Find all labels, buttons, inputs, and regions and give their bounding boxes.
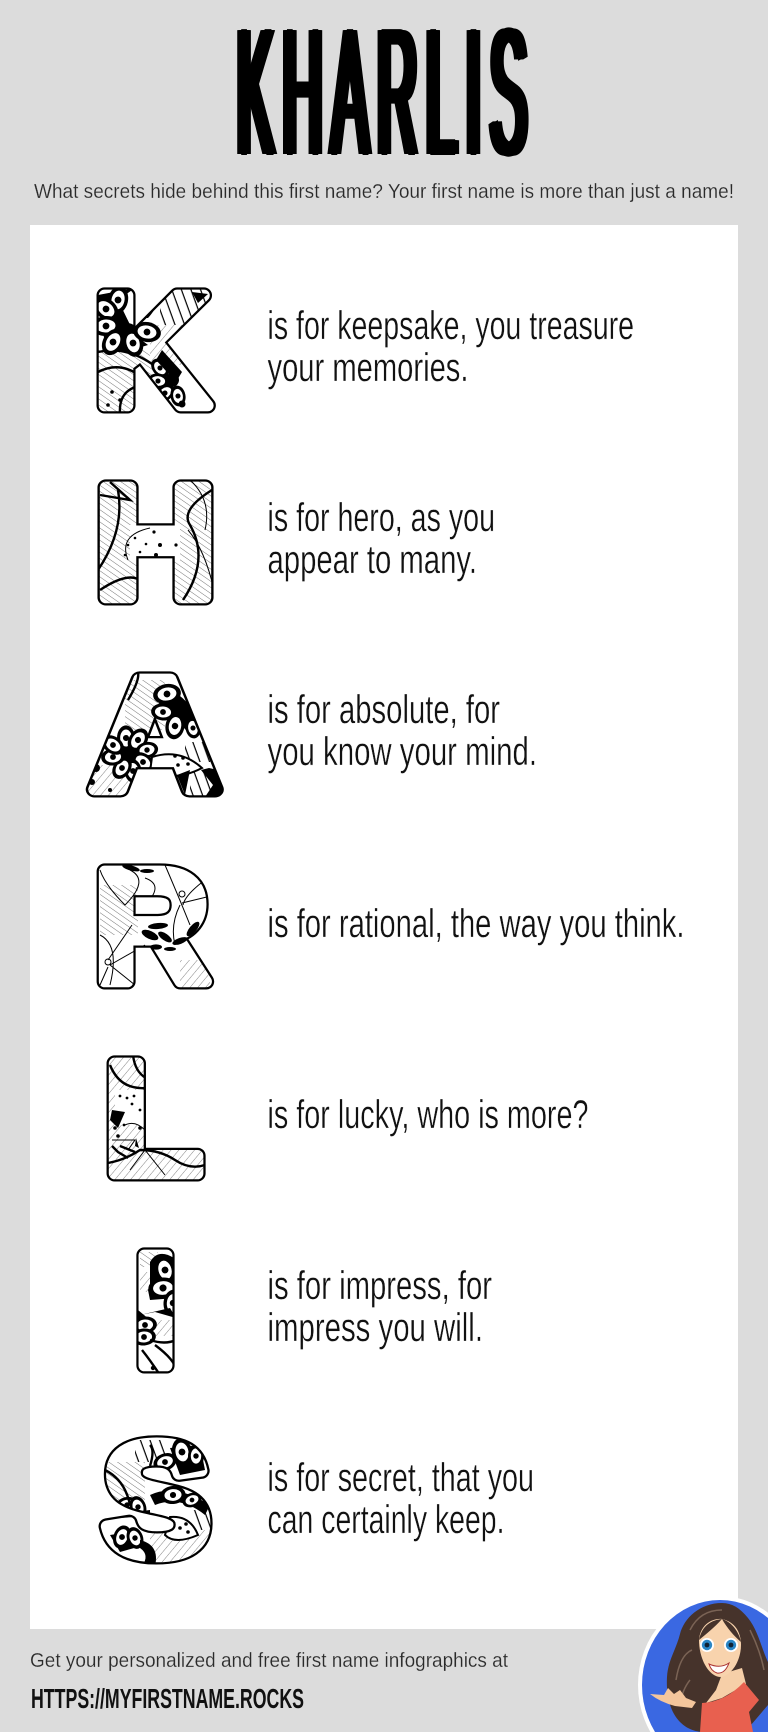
text: L line: is for lucky, who is more? <box>268 1093 588 1137</box>
letter A mandala: A <box>90 644 220 823</box>
text: A line: you know your mind. <box>268 730 537 774</box>
avatar badge <box>638 1596 768 1732</box>
text: I line <box>268 1264 492 1350</box>
letter R mandala <box>96 863 214 990</box>
text: I line: is for impress, for <box>268 1264 492 1308</box>
avatar hair <box>667 1603 768 1732</box>
letter H mandala <box>97 479 214 606</box>
text: S line <box>268 1456 534 1542</box>
avatar hair streaks <box>676 1610 764 1705</box>
avatar hand <box>650 1688 696 1708</box>
text: A line <box>268 688 537 774</box>
letter A mandala <box>86 671 224 798</box>
letter L mandala: L <box>104 1029 203 1208</box>
text: K line: your memories. <box>268 346 468 390</box>
letter S mandala: S <box>102 1411 211 1590</box>
text: S line: is for secret, that you <box>268 1456 534 1500</box>
text: S line: can certainly keep. <box>268 1498 504 1542</box>
text: H line: appear to many. <box>268 538 477 582</box>
avatar neck and face <box>699 1619 746 1703</box>
letter H mandala: H <box>95 453 217 632</box>
avatar red top <box>700 1682 759 1732</box>
footer url: HTTPS://MYFIRSTNAME.ROCKS <box>31 1683 304 1714</box>
footer prompt: Get your personalized and free first name infographics at <box>30 1650 508 1672</box>
text: A line: is for absolute, for <box>268 688 500 732</box>
letter R mandala: R <box>94 836 209 1016</box>
letter I mandala: I <box>134 1221 177 1400</box>
letter K mandala: K <box>94 260 209 440</box>
text: H line <box>268 496 495 582</box>
letter I mandala <box>136 1247 175 1374</box>
text: K line: is for keepsake, you treasure <box>268 304 634 348</box>
subtitle: What secrets hide behind this first name? Your first name is more than just a name! <box>34 180 734 203</box>
text: K line <box>268 304 634 390</box>
text: I line: impress you will. <box>268 1306 483 1350</box>
text: H line: is for hero, as you <box>268 496 495 540</box>
letter L mandala <box>106 1055 206 1182</box>
white content panel <box>30 225 738 1629</box>
letter K mandala <box>96 287 216 414</box>
